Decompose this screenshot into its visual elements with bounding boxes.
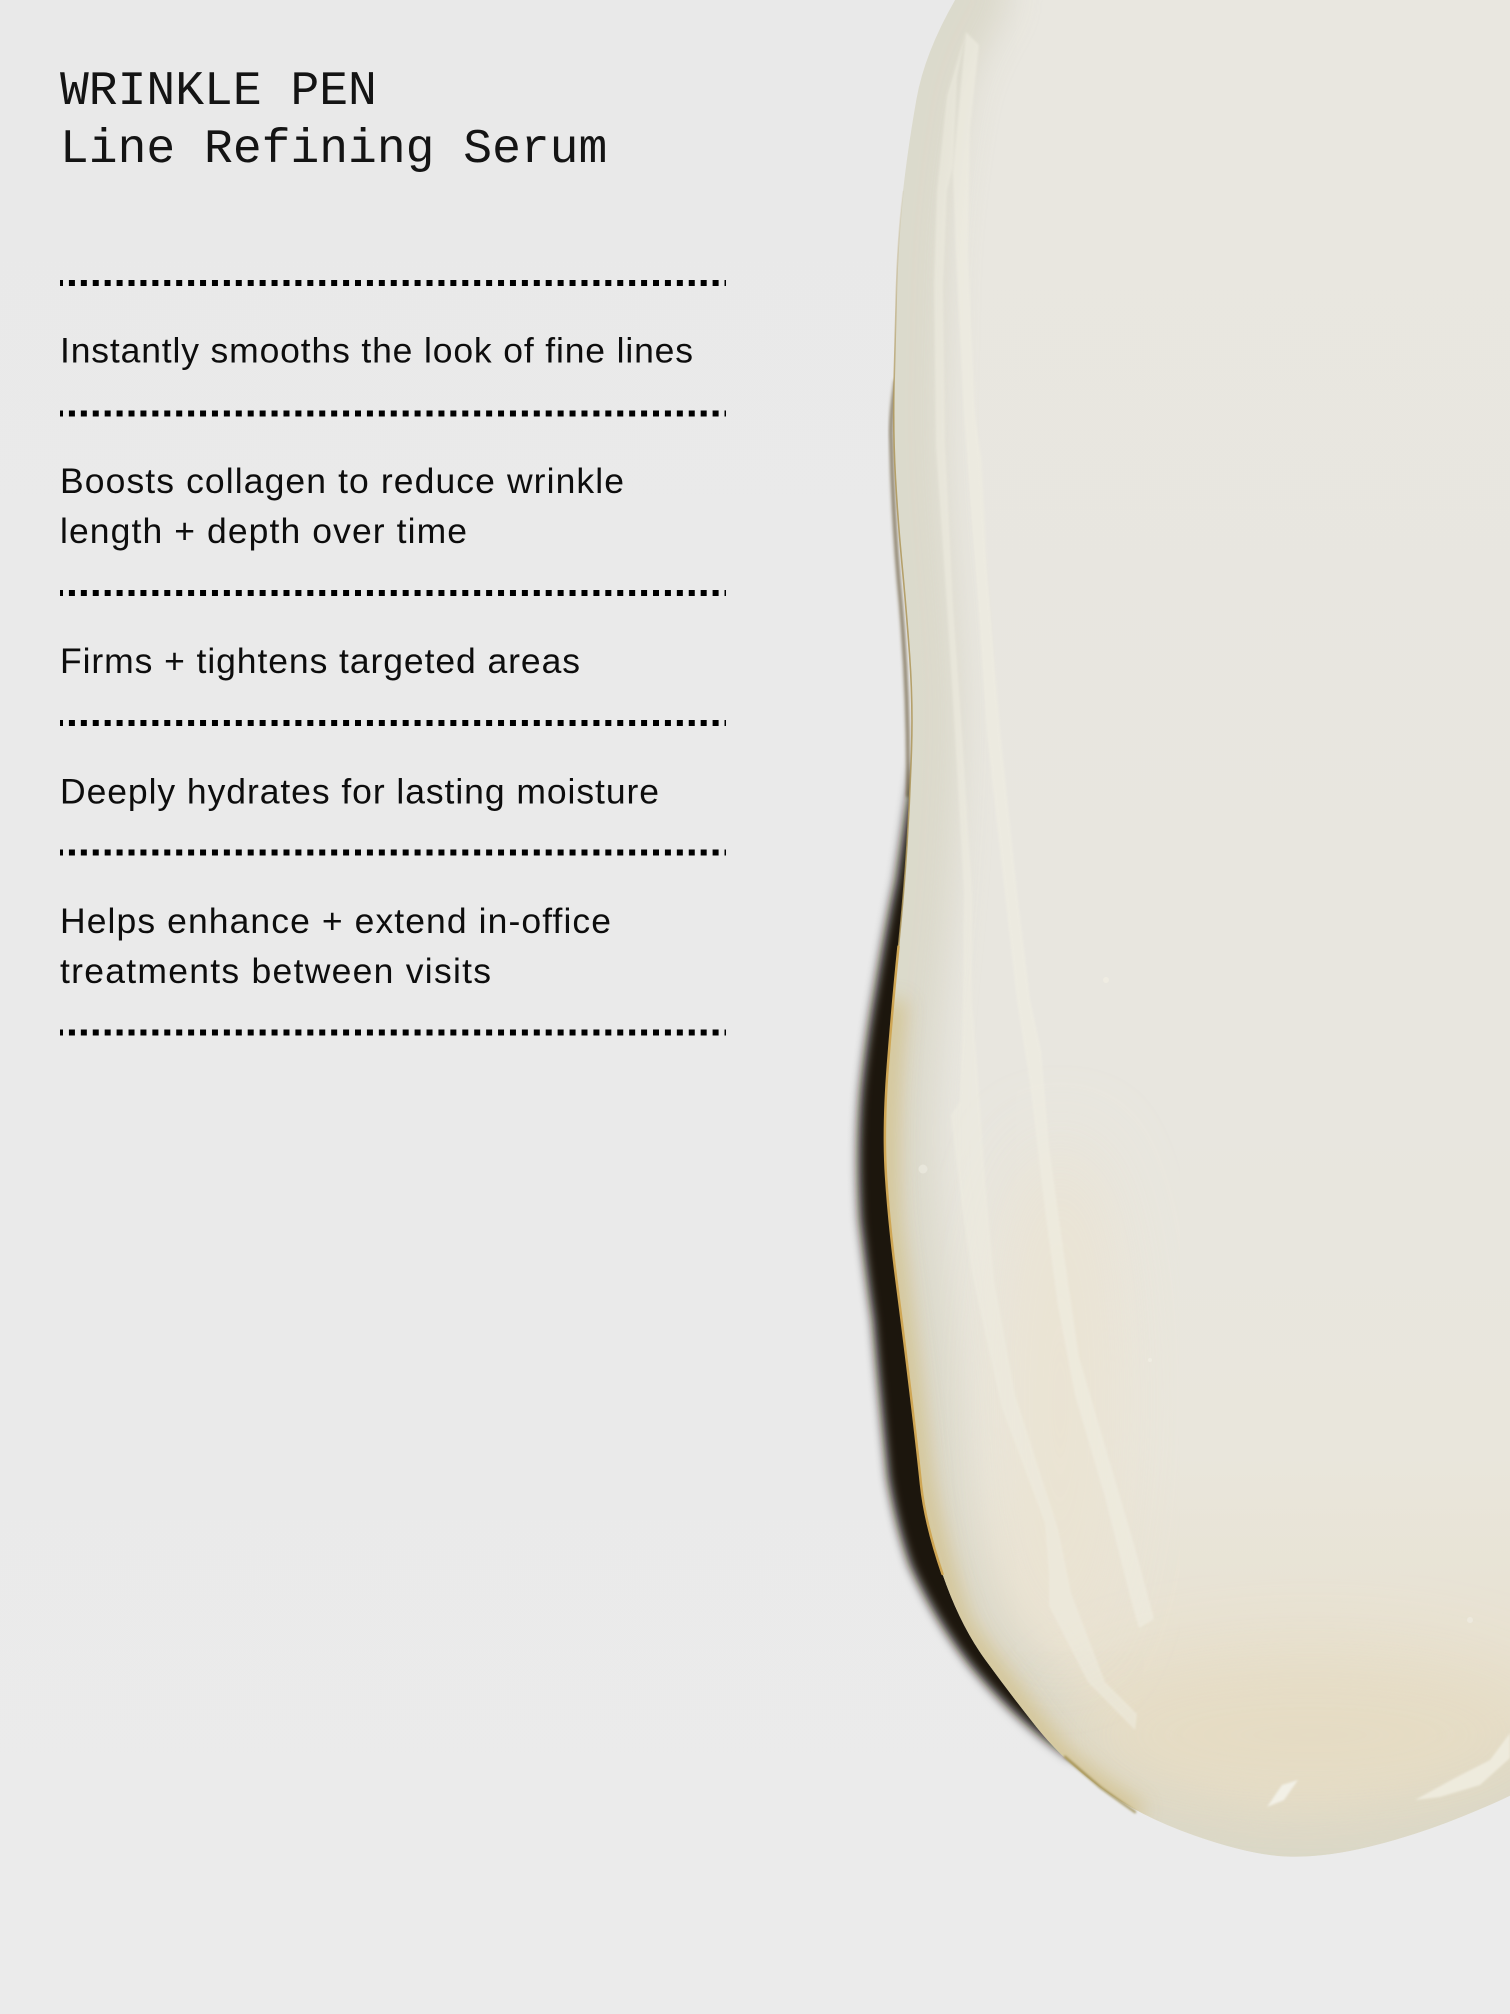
- cream shading: [885, 0, 1510, 1857]
- rule 3: [60, 590, 726, 596]
- rule 4: [60, 720, 726, 726]
- rule 5: [60, 850, 726, 856]
- benefit: boosts collagen: [60, 461, 624, 551]
- benefit: firms and tightens: Firms + tightens targeted areas: [60, 641, 580, 681]
- benefit: boosts collagen: length + depth over time: [60, 511, 467, 551]
- gloss highlight: bottom right: [1415, 1733, 1510, 1800]
- title line 1: WRINKLE PEN: [60, 65, 377, 119]
- gloss streak: outer: [934, 32, 1137, 1730]
- cream body: [885, 0, 1510, 1857]
- surface specks: [918, 977, 1473, 1623]
- rule 6: [60, 1030, 726, 1036]
- rule 1: [60, 280, 726, 286]
- benefit: smooths fine lines: Instantly smooths the look of fine lines: [60, 330, 693, 370]
- title: [60, 65, 607, 177]
- benefit: in-office treatments: Helps enhance + extend in-office: [60, 901, 611, 941]
- rule 2: [60, 410, 726, 416]
- benefit: in-office treatments: treatments between visits: [60, 951, 491, 991]
- gloss streak: inner: [953, 32, 1154, 1628]
- gold rim: [885, 192, 1135, 1812]
- gloss highlight: bottom centre: [1267, 1780, 1298, 1807]
- title line 2: Line Refining Serum: [60, 123, 607, 177]
- benefits list: [60, 283, 726, 1032]
- serum swatch: [858, 0, 1510, 1857]
- cast shadow of swatch: [858, 380, 1100, 1770]
- benefit: in-office treatments: [60, 901, 611, 991]
- benefit: boosts collagen: Boosts collagen to reduce wrinkle: [60, 461, 624, 501]
- benefit: hydrates: Deeply hydrates for lasting moisture: [60, 772, 659, 812]
